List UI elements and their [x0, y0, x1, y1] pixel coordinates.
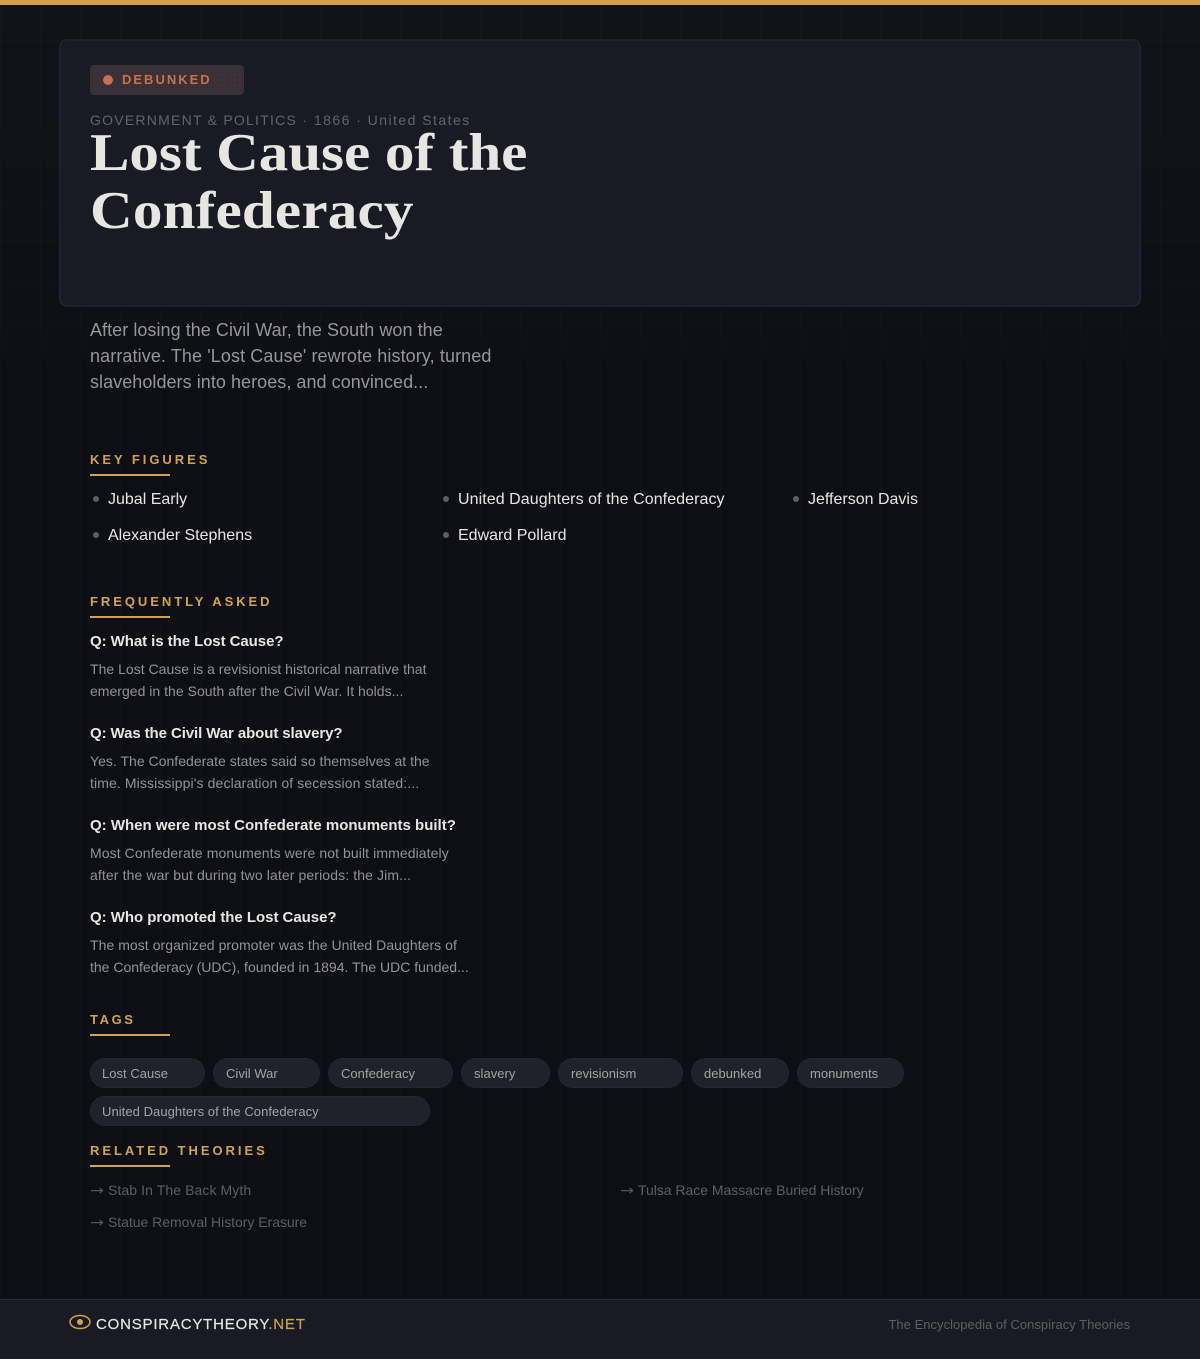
intro text [90, 320, 492, 392]
footer tagline: The Encyclopedia of Conspiracy Theories [888, 1317, 1130, 1332]
faq 2 answer [90, 753, 430, 791]
badge: debunked [90, 65, 244, 95]
figure: Jubal Early: Jubal Early [108, 491, 187, 508]
tag: Civil War [226, 1066, 278, 1081]
faq 2 answer: time. Mississippi's declaration of secession stated:... [90, 775, 419, 791]
tag: debunked [704, 1066, 761, 1081]
related link: → [90, 1215, 104, 1231]
figure: United Daughters of the Confederacy: United Daughters of the Confederacy [458, 491, 725, 508]
title [90, 124, 527, 240]
faq 4 answer: the Confederacy (UDC), founded in 1894. The UDC funded... [90, 959, 469, 975]
tag: United Daughters of the Confederacy [102, 1104, 319, 1119]
tag [797, 1058, 904, 1088]
figure: Alexander Stephens: Alexander Stephens [108, 527, 252, 544]
tag: slavery [474, 1066, 515, 1081]
faq 3 answer: Most Confederate monuments were not built immediately [90, 845, 449, 861]
tag [558, 1058, 683, 1088]
badge dot [103, 75, 113, 85]
footer [0, 1299, 1200, 1359]
footer logo text: CONSPIRACYTHEORY.NET [96, 1316, 306, 1333]
faq 2 question: Q: Was the Civil War about slavery? [90, 725, 342, 742]
faq 4 answer [90, 937, 469, 975]
intro text: slaveholders into heroes, and convinced... [90, 372, 428, 392]
heading: frequently asked: FREQUENTLY ASKED [90, 594, 273, 609]
tag list [90, 1058, 904, 1126]
faq 1 answer [90, 661, 427, 699]
heading: related theories: RELATED THEORIES [90, 1143, 268, 1158]
related link: Stab In The Back Myth [108, 1182, 251, 1198]
related link: Tulsa Race Massacre Buried History [638, 1182, 864, 1198]
figure: Jefferson Davis: Jefferson Davis [808, 491, 918, 508]
tag: revisionism [571, 1066, 636, 1081]
faq 3 question: Q: When were most Confederate monuments built? [90, 817, 456, 834]
faq 1 answer: The Lost Cause is a revisionist historical narrative that [90, 661, 427, 677]
top accent bar [0, 0, 1200, 5]
intro text: narrative. The 'Lost Cause' rewrote history, turned [90, 346, 492, 366]
faq 1 question: Q: What is the Lost Cause? [90, 633, 283, 650]
title: Confederacy [90, 182, 414, 240]
tag [90, 1058, 205, 1088]
related link: Statue Removal History Erasure [108, 1214, 307, 1230]
related link: → [90, 1183, 104, 1199]
tag [90, 1096, 430, 1126]
tag: Lost Cause [102, 1066, 168, 1081]
faq 4 answer: The most organized promoter was the United Daughters of [90, 937, 457, 953]
faq 2 answer: Yes. The Confederate states said so themselves at the [90, 753, 430, 769]
faq 1 answer: emerged in the South after the Civil War. It holds... [90, 683, 403, 699]
related link: → [620, 1183, 634, 1199]
tag [328, 1058, 453, 1088]
tag: Confederacy [341, 1066, 415, 1081]
heading: key figures: KEY FIGURES [90, 452, 210, 467]
tag: monuments [810, 1066, 878, 1081]
category meta line: GOVERNMENT & POLITICS · 1866 · United States [90, 112, 471, 128]
faq 3 answer [90, 845, 449, 883]
intro text: After losing the Civil War, the South won the [90, 320, 443, 340]
key figures list [93, 491, 918, 544]
tag [691, 1058, 789, 1088]
badge label: DEBUNKED [122, 72, 212, 87]
icon: eye logo [69, 1314, 91, 1330]
tag [461, 1058, 550, 1088]
faq 4 question: Q: Who promoted the Lost Cause? [90, 909, 337, 926]
figure: Edward Pollard: Edward Pollard [458, 527, 566, 544]
tag [213, 1058, 320, 1088]
panel: hero [59, 39, 1141, 307]
heading: tags: TAGS [90, 1012, 136, 1027]
faq 3 answer: after the war but during two later periods: the Jim... [90, 867, 411, 883]
title: Lost Cause of the [90, 124, 527, 182]
